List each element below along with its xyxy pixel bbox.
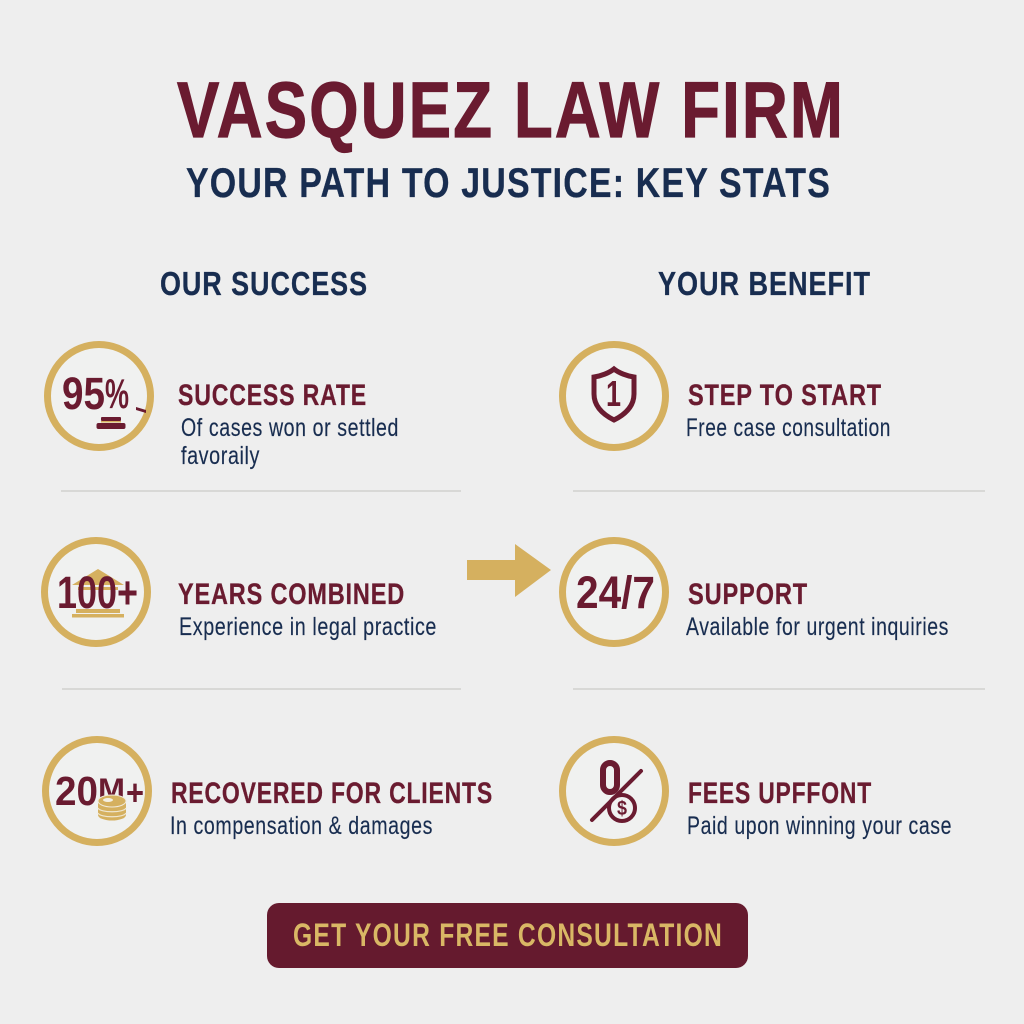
label: fees upfront: FEES UPFFONT: [688, 777, 872, 810]
description: success rate: Of cases won or settled: [181, 414, 399, 442]
icon: 24/7 badge: [562, 540, 666, 644]
panel: step to start: [562, 344, 891, 448]
label: support: SUPPORT: [688, 578, 808, 611]
label: success rate: SUCCESS RATE: [178, 379, 367, 412]
icon: 20M+ badge with coins: 20: [55, 768, 98, 814]
icon: 100+ badge with courthouse: [44, 540, 148, 644]
panel: success rate: [48, 344, 399, 470]
heading: your benefit: YOUR BENEFIT: [658, 265, 871, 302]
call to action button: GET YOUR FREE CONSULTATION: [293, 917, 723, 953]
icon: zero percent fee: $: [617, 798, 627, 820]
subtitle: YOUR PATH TO JUSTICE: KEY STATS: [186, 159, 831, 206]
description: fees upfront: Paid upon winning your case: [687, 812, 952, 840]
description: years combined: Experience in legal practice: [179, 613, 437, 641]
description: success rate: favoraily: [181, 442, 260, 470]
heading: our success: OUR SUCCESS: [160, 265, 368, 302]
icon: 95% badge: 95: [62, 368, 105, 419]
icon: 100+ badge with courthouse: 100+: [57, 567, 138, 618]
icon: zero percent fee: [562, 740, 666, 842]
description: recovered for clients: In compensation & damages: [170, 812, 433, 840]
icon: 95% badge: [48, 344, 150, 448]
call to action button: [267, 903, 748, 968]
panel: fees upfront: [562, 740, 952, 842]
panel: recovered for clients: [46, 740, 493, 842]
icon: shield with 1: 1: [606, 373, 621, 414]
arrow: [467, 544, 551, 597]
icon: 20M+ badge with coins: [46, 740, 148, 842]
icon: shield with 1: [562, 344, 666, 448]
description: support: Available for urgent inquiries: [686, 613, 949, 641]
icon: 95% badge: %: [105, 370, 129, 417]
icon: 20M+ badge with coins: M: [98, 773, 125, 806]
description: step to start: Free case consultation: [686, 414, 891, 442]
panel: years combined: [44, 540, 437, 644]
panel: support: [562, 540, 949, 644]
icon: 24/7 badge: 24/7: [576, 567, 655, 618]
title: VASQUEZ LAW FIRM: [177, 65, 845, 154]
label: recovered for clients: RECOVERED FOR CLIENTS: [171, 777, 493, 810]
icon: 20M+ badge with coins: +: [126, 772, 144, 813]
label: step to start: STEP TO START: [688, 379, 882, 412]
label: years combined: YEARS COMBINED: [178, 578, 405, 611]
